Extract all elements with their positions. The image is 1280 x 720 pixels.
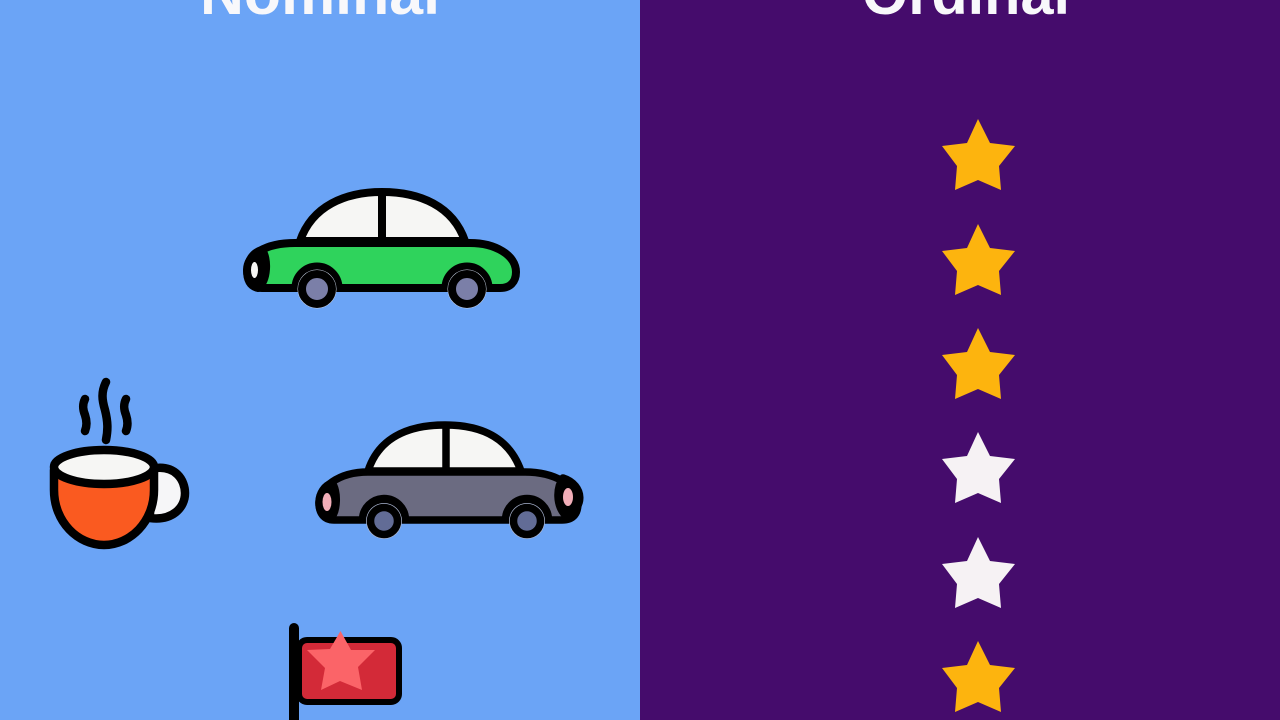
rating stars column — [942, 119, 1015, 712]
star 1: gold — [942, 119, 1015, 190]
icon: coffee cup — [54, 382, 185, 545]
star 2: gold — [942, 224, 1015, 295]
star 5: white — [942, 537, 1015, 608]
icon: green car — [247, 192, 516, 308]
star 6: gold — [942, 641, 1015, 712]
icon: grey car — [319, 425, 580, 539]
star 4: white — [942, 432, 1015, 503]
panel: nominal — [0, 0, 640, 720]
icon: red flag with star — [289, 623, 399, 720]
star 3: gold — [942, 328, 1015, 399]
panel: ordinal — [640, 0, 1280, 720]
